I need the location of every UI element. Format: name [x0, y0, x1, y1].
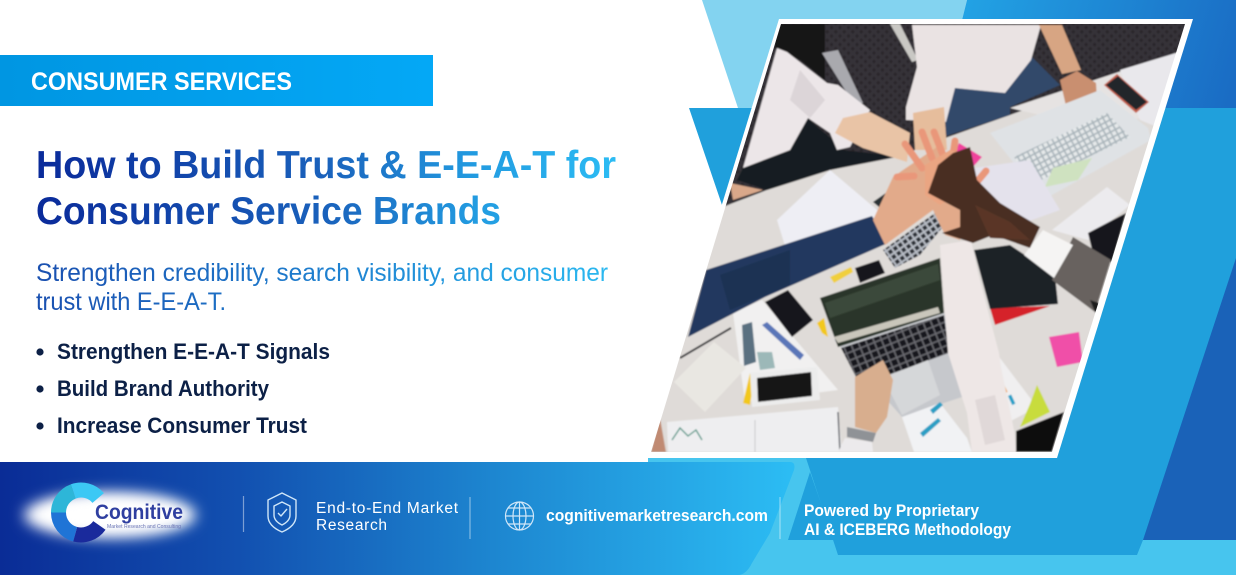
photo white phone	[749, 372, 820, 407]
photo chair post	[822, 50, 863, 106]
photo lime sticky	[1020, 385, 1050, 427]
methodology text: AI & ICEBERG Methodology	[804, 521, 1012, 539]
photo: team hands stacked over a desk	[640, 20, 1200, 460]
footer logo	[24, 490, 196, 538]
subtitle: Strengthen credibility, search visibility, and consumer	[36, 259, 608, 287]
photo bottom left papers	[667, 407, 842, 452]
bullet list	[36, 339, 330, 438]
photo desk	[640, 52, 1190, 460]
photo white sleeve	[940, 240, 1016, 452]
feature text: end-to-end research	[316, 500, 459, 534]
title	[36, 144, 616, 233]
photo black tablet and red folder	[990, 306, 1050, 325]
photo dark phone	[765, 290, 813, 337]
photo desk items right of hands	[1052, 187, 1130, 240]
photo frame	[644, 19, 1193, 458]
photo carpet background	[726, 24, 1185, 207]
photo laptop top right	[990, 90, 1151, 200]
photo white cuff	[1024, 230, 1073, 278]
photo hand pile	[873, 132, 986, 245]
photo left papers and charts	[733, 300, 838, 402]
title: Consumer Service Brands	[36, 190, 501, 233]
feature text: end-to-end research: Research	[316, 517, 387, 534]
subtitle: trust with E-E-A-T.	[36, 288, 226, 316]
photo small phone	[855, 260, 885, 283]
bullet list: Increase Consumer Trust	[57, 413, 307, 438]
bullet list: Build Brand Authority	[57, 376, 269, 401]
photo paper left of hands	[777, 170, 878, 245]
photo centre laptop	[834, 312, 968, 417]
photo centre person	[945, 55, 1060, 136]
subtitle	[36, 259, 608, 316]
photo watch	[847, 427, 876, 442]
photo phone top right	[1104, 74, 1149, 113]
photo small yellow tab	[743, 373, 755, 405]
photo white chart paper	[1000, 359, 1032, 420]
background: geometric blue shapes	[648, 0, 1236, 575]
methodology text	[804, 502, 1012, 539]
footer divider lines	[244, 496, 780, 539]
photo black corner	[1016, 412, 1064, 452]
photo pink sticky note	[1049, 332, 1083, 367]
photo grey suit arm	[1052, 237, 1111, 312]
photo notebook	[674, 342, 746, 412]
footer logo: Cognitive	[95, 500, 183, 524]
photo pen	[762, 322, 804, 360]
photo dark hand	[928, 147, 1040, 248]
methodology text: Powered by Proprietary	[804, 502, 980, 520]
photo typing hand	[855, 360, 893, 433]
photo dark keyboard under hands	[883, 213, 942, 268]
icon: globe	[506, 502, 534, 530]
footer logo: Market Research and Consulting	[107, 524, 181, 530]
title: How to Build Trust & E-E-A-T for	[36, 144, 616, 187]
photo navy arm	[688, 216, 888, 337]
footer bar	[0, 462, 1012, 575]
feature text: end-to-end research: End-to-End Market	[316, 500, 459, 517]
photo pink sticky behind hands	[956, 142, 982, 166]
category banner	[0, 55, 433, 106]
photo teal chart paper	[902, 403, 972, 452]
category banner: CONSUMER SERVICES	[31, 68, 292, 96]
photo left person	[737, 118, 897, 190]
bullet list: Strengthen E-E-A-T Signals	[57, 339, 330, 364]
icon: shield with check	[268, 493, 296, 532]
website url: cognitivemarketresearch.com	[546, 507, 768, 525]
